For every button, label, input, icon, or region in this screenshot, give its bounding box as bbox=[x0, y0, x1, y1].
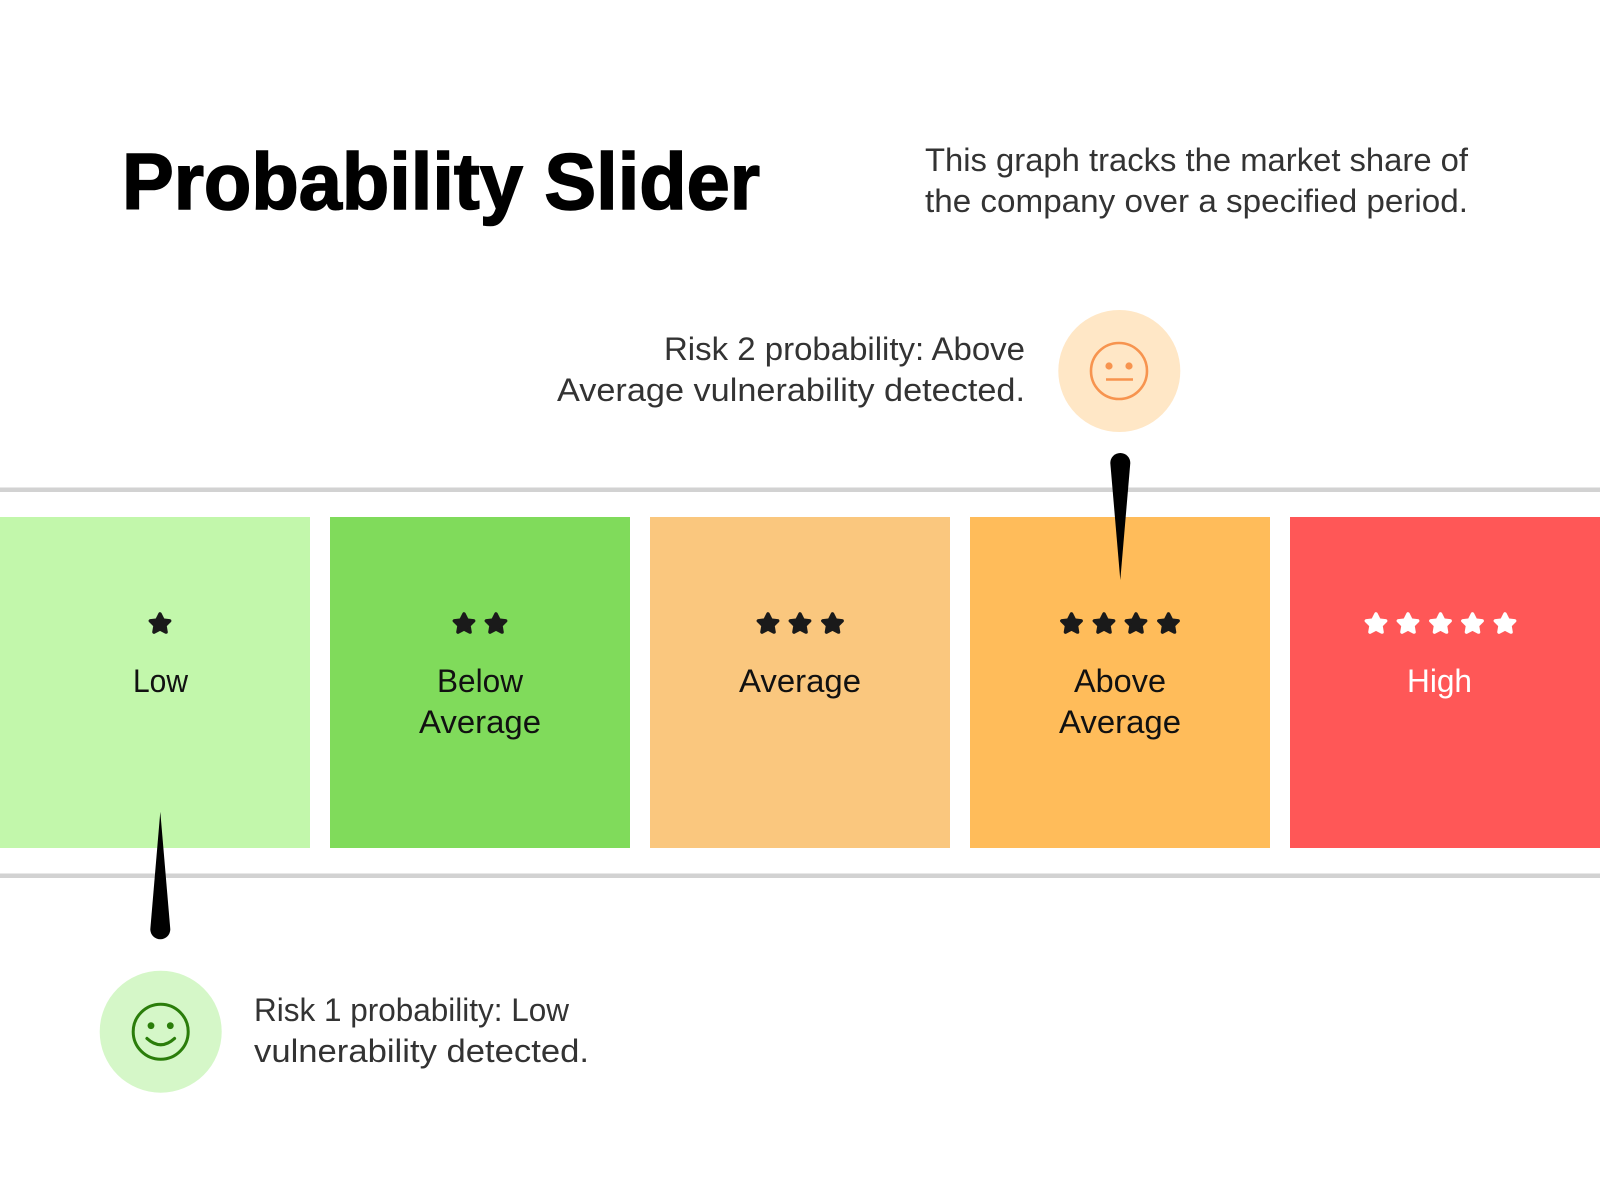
panel: low bbox=[0, 517, 310, 848]
panel: average bbox=[650, 517, 950, 848]
label: below average: Below bbox=[437, 663, 524, 699]
label: low: Low bbox=[133, 663, 189, 699]
label: above average: Above bbox=[1074, 663, 1166, 699]
panel: below average bbox=[330, 517, 630, 848]
icon: smiling face bbox=[100, 971, 222, 1093]
label: above average: Average bbox=[1059, 704, 1181, 740]
arrow: risk 2 pointer bbox=[1110, 453, 1130, 580]
callout: risk 1 text: vulnerability detected. bbox=[254, 1033, 589, 1069]
stars: three bbox=[758, 614, 842, 632]
description text bbox=[925, 142, 1468, 219]
callout: risk 2 text bbox=[557, 331, 1025, 408]
panel: above average bbox=[970, 517, 1270, 848]
stars: five bbox=[1366, 614, 1515, 632]
icon: neutral face bbox=[1058, 310, 1180, 432]
label: high: High bbox=[1407, 663, 1472, 699]
stars: two bbox=[454, 614, 506, 632]
stars: four bbox=[1062, 614, 1178, 632]
arrow: risk 1 pointer bbox=[150, 812, 170, 939]
description text: the company over a specified period. bbox=[925, 183, 1468, 219]
label: below average bbox=[419, 663, 541, 740]
panel: high bbox=[1290, 517, 1600, 848]
stars: one bbox=[150, 614, 170, 632]
label: above average bbox=[1059, 663, 1181, 740]
title: Probability Slider bbox=[122, 137, 760, 226]
callout: risk 2 text: Risk 2 probability: Above bbox=[664, 331, 1025, 367]
label: below average: Average bbox=[419, 704, 541, 740]
callout: risk 1 text: Risk 1 probability: Low bbox=[254, 992, 570, 1028]
callout: risk 1 text bbox=[254, 992, 589, 1069]
callout: risk 2 text: Average vulnerability detected. bbox=[557, 372, 1025, 408]
label: average: Average bbox=[739, 663, 861, 699]
description text: This graph tracks the market share of bbox=[925, 142, 1468, 178]
